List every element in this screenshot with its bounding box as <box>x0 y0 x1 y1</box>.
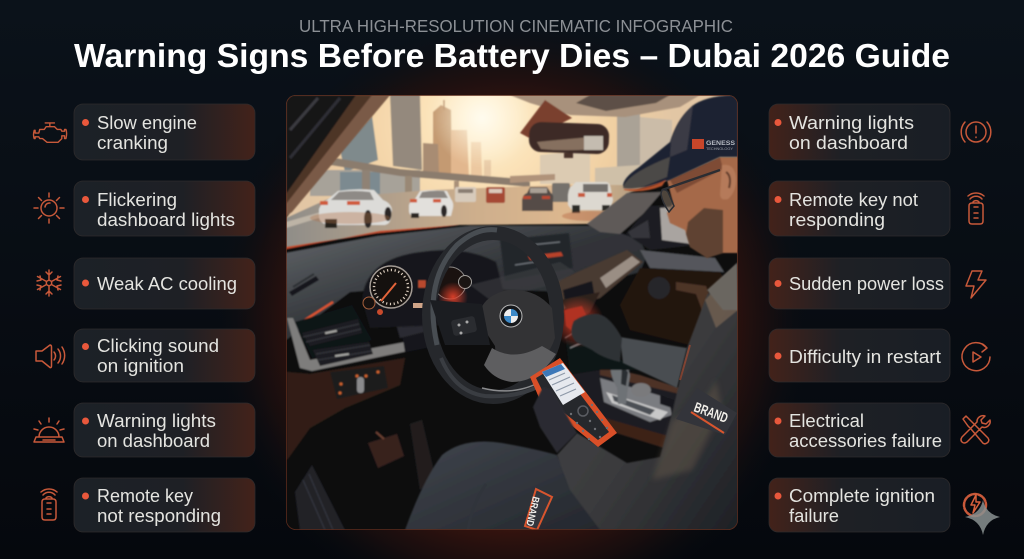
icon: lightning bolt <box>966 271 986 298</box>
rear-view mirror <box>529 122 609 158</box>
card: remote key not responding <box>74 478 255 532</box>
leg BRAND patch: BRAND <box>523 495 541 527</box>
cap logo: TECHNOLOGY <box>706 146 733 151</box>
card: warning lights on dashboard: on dashboard <box>97 431 210 451</box>
card: remote key not responding: not responding <box>97 506 221 526</box>
car: white sedan <box>319 189 392 228</box>
card: remote key not responding: Remote key <box>97 486 193 506</box>
cars: distant traffic <box>310 182 618 224</box>
face <box>667 157 738 310</box>
card: sudden power loss: Sudden power loss <box>789 274 944 294</box>
card: warning lights on dashboard: on dashboard <box>789 133 908 153</box>
icon: engine <box>34 123 67 142</box>
card: sudden power loss <box>769 258 950 309</box>
car: second white sedan <box>409 190 453 218</box>
left column <box>34 104 255 532</box>
A-pillar <box>286 95 390 218</box>
cap logo: GENESS <box>706 140 736 147</box>
right column <box>769 104 991 532</box>
card: warning lights on dashboard: Warning lights <box>97 411 216 431</box>
shoulder BRAND patch: BRAND <box>692 399 730 426</box>
pedals <box>295 420 436 530</box>
infotainment screen <box>470 233 575 300</box>
torso and left arm <box>557 262 738 530</box>
windscreen view <box>286 95 738 268</box>
card: flickering dashboard lights: Flickering <box>97 190 177 210</box>
icon: beacon light <box>34 418 64 442</box>
center console and gear shifter <box>564 333 678 448</box>
dashboard <box>286 180 738 530</box>
icon: restart <box>962 343 990 371</box>
icon: BMW badge <box>500 305 522 327</box>
card: clicking sound on ignition <box>74 329 255 382</box>
watermark sparkle <box>965 500 1000 535</box>
card: complete ignition failure <box>769 478 950 532</box>
card: clicking sound on ignition: on ignition <box>97 356 184 376</box>
icon: crossed tools <box>961 416 990 444</box>
card: difficulty in restart <box>769 329 950 382</box>
instrument cluster <box>362 250 506 328</box>
card: warning lights on dashboard: Warning lights <box>789 113 914 133</box>
card: remote key not responding: responding <box>789 210 885 230</box>
card: complete ignition failure: Complete ignition <box>789 486 935 506</box>
card: electrical accessories failure: Electrical <box>789 411 864 431</box>
card: electrical accessories failure: accessories failure <box>789 431 942 451</box>
ceiling and rear-view mirror <box>510 95 700 158</box>
card: flickering dashboard lights <box>74 181 255 236</box>
icon: flickering light <box>34 193 64 223</box>
card: flickering dashboard lights: dashboard lights <box>97 210 235 230</box>
baseball cap <box>623 95 738 191</box>
card: weak AC cooling <box>74 258 255 309</box>
icon: gear with bolt <box>964 494 986 516</box>
card: warning lights on dashboard <box>769 104 950 160</box>
icon: snowflake <box>37 270 61 296</box>
card: difficulty in restart: Difficulty in restart <box>789 347 941 367</box>
panel: central photo illustration <box>286 68 738 530</box>
steering wheel <box>429 230 604 397</box>
card: warning lights on dashboard <box>74 403 255 457</box>
leg <box>405 442 602 530</box>
card: remote key not responding <box>769 181 950 236</box>
icon: remote key <box>968 193 984 224</box>
title: Warning Signs Before Battery Dies – Dubai 2026 Guide <box>74 37 950 74</box>
icon: speaker <box>36 345 65 368</box>
technician <box>405 95 738 530</box>
card: electrical accessories failure <box>769 403 950 457</box>
card: slow engine cranking: Slow engine <box>97 113 197 133</box>
icon: remote key <box>41 489 57 520</box>
OBD scanner in hand <box>530 358 617 453</box>
leg BRAND patch <box>523 489 552 530</box>
card: remote key not responding: Remote key not <box>789 190 918 210</box>
cap logo <box>692 139 736 151</box>
card: slow engine cranking <box>74 104 255 160</box>
card: complete ignition failure: failure <box>789 506 839 526</box>
card: clicking sound on ignition: Clicking sound <box>97 336 219 356</box>
subtitle: ULTRA HIGH-RESOLUTION CINEMATIC INFOGRAPHIC <box>299 16 733 36</box>
glasses <box>661 170 720 212</box>
card: slow engine cranking: cranking <box>97 133 168 153</box>
right sleeve and glove <box>571 314 687 388</box>
icon: brake warning <box>961 122 991 142</box>
card: weak AC cooling: Weak AC cooling <box>97 274 237 294</box>
shoulder BRAND patch <box>676 394 736 434</box>
